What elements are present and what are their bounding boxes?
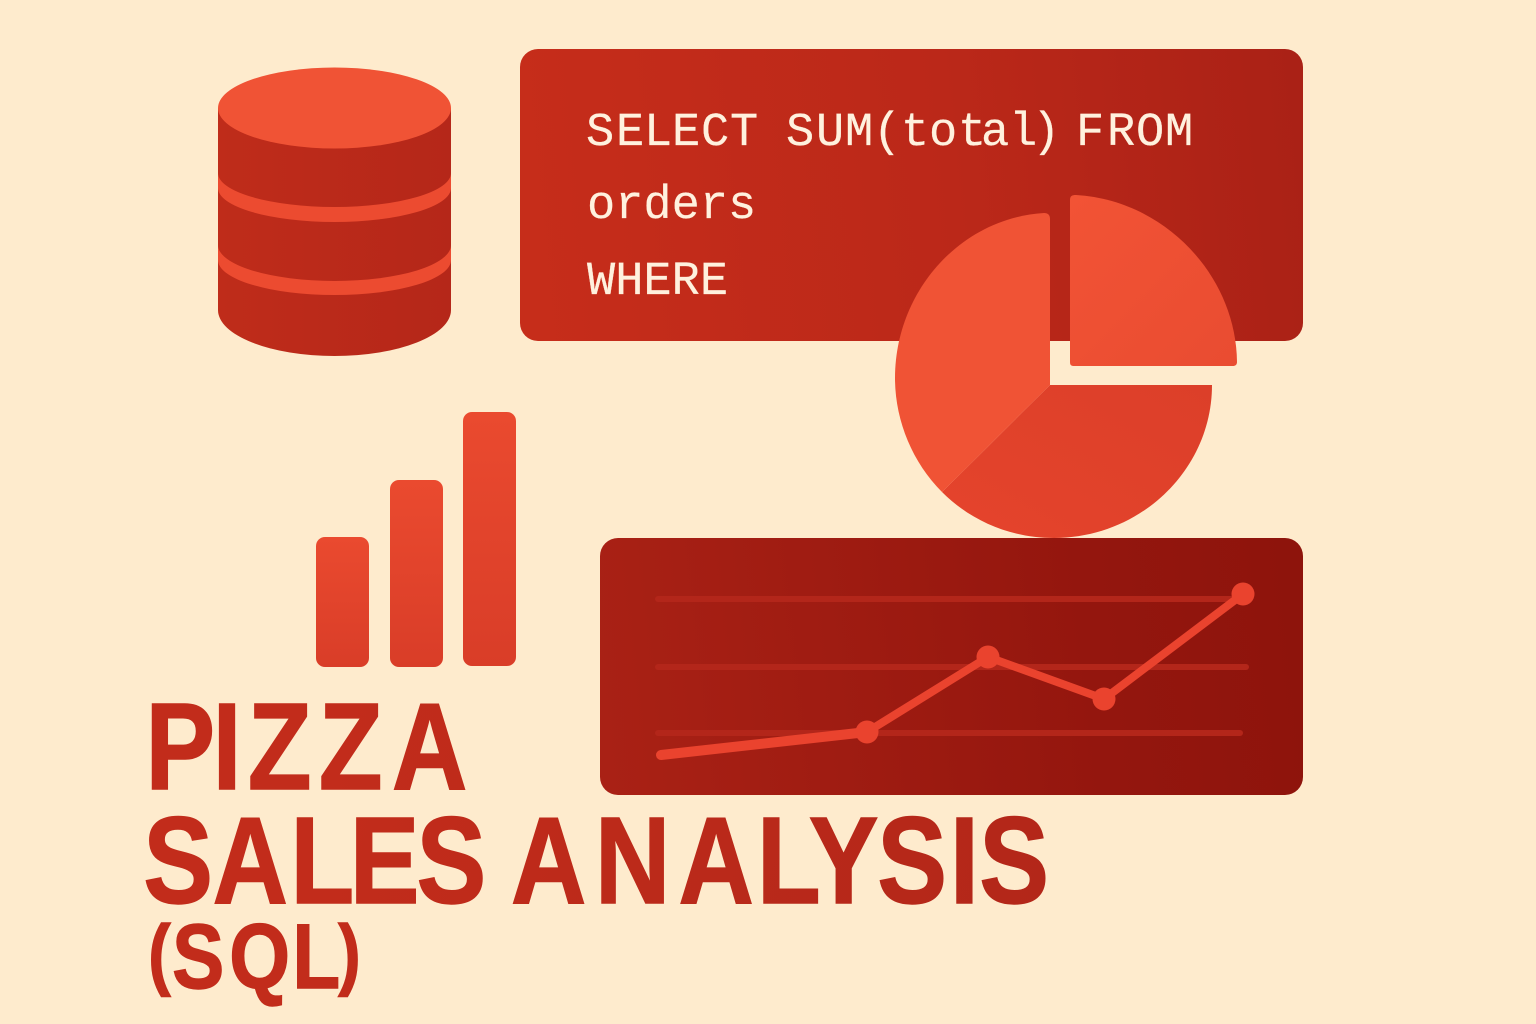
chart: pie chart xyxy=(895,195,1237,538)
code text: orders xyxy=(587,180,756,233)
title: ) xyxy=(338,909,361,997)
title: PIZZA xyxy=(145,679,467,816)
title xyxy=(143,679,1049,1008)
title: SALES ANALYSIS xyxy=(143,793,1049,930)
code text: WHERE xyxy=(587,256,728,309)
chart: bar chart icon xyxy=(316,412,516,667)
title: ( xyxy=(148,909,171,997)
panel: line chart xyxy=(600,538,1303,795)
code text: SELECT SUM(total) FROM xyxy=(586,107,1193,160)
trend line xyxy=(661,582,1254,755)
icon: database cylinder xyxy=(218,68,451,356)
code text xyxy=(586,107,1193,309)
panel: SQL code xyxy=(520,49,1303,341)
title: SQL xyxy=(172,906,340,1008)
